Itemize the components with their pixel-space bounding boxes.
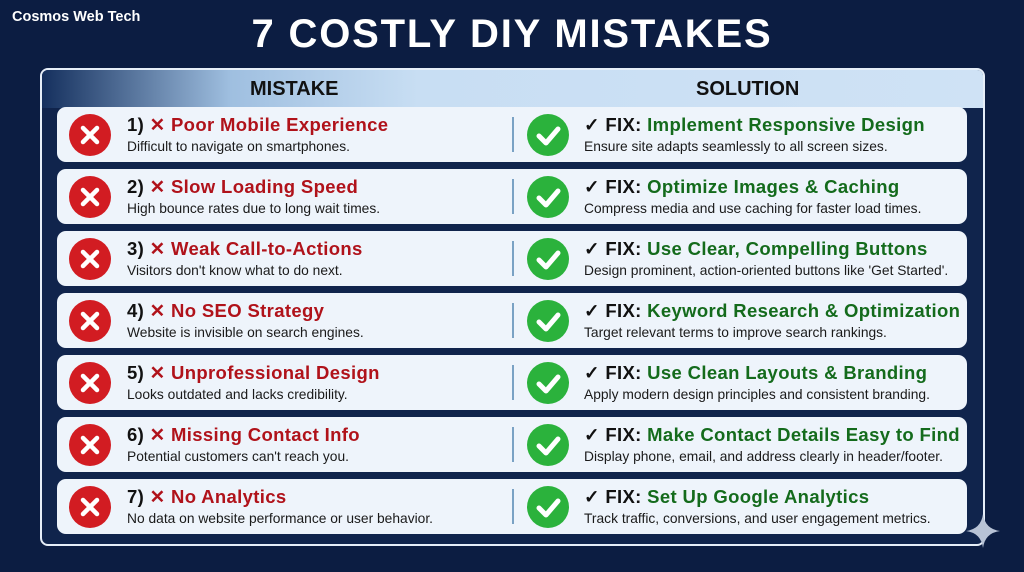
panel: table xyxy=(40,68,985,546)
row 5: Looks outdated and lacks credibility. xyxy=(127,387,348,402)
row 4: Target relevant terms to improve search rankings. xyxy=(584,325,887,340)
row 1: 1) ✕ Poor Mobile Experience xyxy=(127,114,388,135)
row 4 xyxy=(57,293,967,348)
row 5: Apply modern design principles and consistent branding. xyxy=(584,387,930,402)
row 7: 7) ✕ No Analytics xyxy=(127,486,287,507)
row 6: Display phone, email, and address clearly in header/footer. xyxy=(584,449,943,464)
title: 7 COSTLY DIY MISTAKES xyxy=(252,12,772,56)
row 6: ✓ FIX: Make Contact Details Easy to Find xyxy=(584,424,960,445)
row 7: ✓ FIX: Set Up Google Analytics xyxy=(584,486,869,507)
row 3: ✓ FIX: Use Clear, Compelling Buttons xyxy=(584,238,928,259)
row 5 xyxy=(57,355,967,410)
row 5: 5) ✕ Unprofessional Design xyxy=(127,362,380,383)
row 4: Website is invisible on search engines. xyxy=(127,325,364,340)
header bar: SOLUTION xyxy=(696,78,799,100)
header bar xyxy=(42,70,983,108)
row 7 xyxy=(57,479,967,534)
row 7: No data on website performance or user behavior. xyxy=(127,511,433,526)
row 3: Design prominent, action-oriented buttons like 'Get Started'. xyxy=(584,263,948,278)
row 5: ✓ FIX: Use Clean Layouts & Branding xyxy=(584,362,927,383)
row 1: ✓ FIX: Implement Responsive Design xyxy=(584,114,925,135)
row 1 xyxy=(57,107,967,162)
row 6 xyxy=(57,417,967,472)
row 2: Compress media and use caching for faster load times. xyxy=(584,201,921,216)
brand: Cosmos Web Tech xyxy=(12,9,140,25)
row 7: Track traffic, conversions, and user engagement metrics. xyxy=(584,511,931,526)
row 2: High bounce rates due to long wait times. xyxy=(127,201,380,216)
row 3: 3) ✕ Weak Call-to-Actions xyxy=(127,238,363,259)
row 3 xyxy=(57,231,967,286)
row 2 xyxy=(57,169,967,224)
row 6: Potential customers can't reach you. xyxy=(127,449,349,464)
row 3: Visitors don't know what to do next. xyxy=(127,263,343,278)
header bar: MISTAKE xyxy=(250,78,339,100)
row 4: 4) ✕ No SEO Strategy xyxy=(127,300,324,321)
row 6: 6) ✕ Missing Contact Info xyxy=(127,424,360,445)
row 1: Ensure site adapts seamlessly to all screen sizes. xyxy=(584,139,888,154)
row 4: ✓ FIX: Keyword Research & Optimization xyxy=(584,300,960,321)
row 1: Difficult to navigate on smartphones. xyxy=(127,139,350,154)
row 2: ✓ FIX: Optimize Images & Caching xyxy=(584,176,900,197)
row 2: 2) ✕ Slow Loading Speed xyxy=(127,176,358,197)
icon: sparkle xyxy=(966,514,1000,548)
